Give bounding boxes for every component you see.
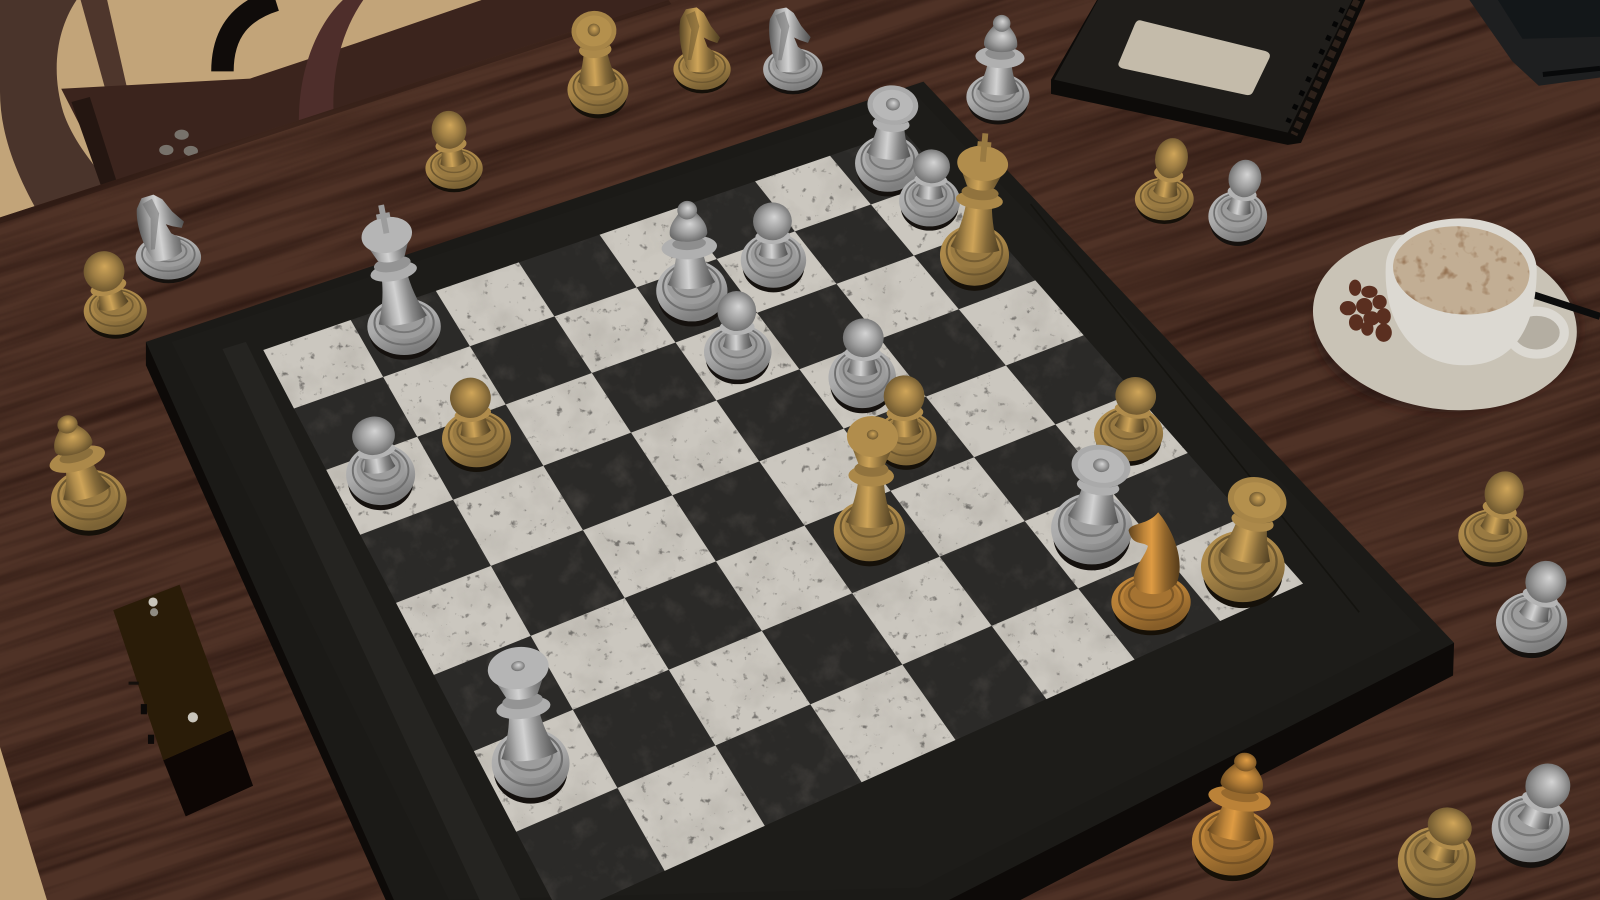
silver pawn, table right xyxy=(1208,157,1267,246)
silver pawn, board centre right xyxy=(828,318,896,413)
chair xyxy=(0,0,127,217)
coffee cup and saucer xyxy=(1312,218,1600,414)
gold pawn, board left xyxy=(442,375,511,472)
gold bishop, table bottom xyxy=(1192,748,1278,881)
gold pawn, behind board xyxy=(425,109,483,192)
device at top right xyxy=(1469,0,1600,86)
silver queen xyxy=(485,643,570,804)
gold pawn, board centre xyxy=(876,374,937,470)
silver bishop, top of table xyxy=(966,14,1030,124)
silver bishop, board xyxy=(656,199,727,327)
cup handle xyxy=(1509,311,1564,354)
leather bag xyxy=(61,0,673,189)
spoon xyxy=(1531,294,1600,316)
chess clock xyxy=(113,585,253,816)
silver knight, top of table xyxy=(763,7,823,94)
saucer xyxy=(1301,216,1588,427)
silver pawn, board left xyxy=(346,413,415,510)
gold knight, board right xyxy=(1111,512,1191,635)
gold queen xyxy=(834,415,905,566)
silver pawn, board centre xyxy=(704,291,772,384)
notebook xyxy=(1051,0,1365,145)
silver pawn, board far corner xyxy=(899,148,960,231)
silver pawn, table right xyxy=(1496,555,1572,658)
gold bishop, left of the table xyxy=(38,408,127,536)
notebook label xyxy=(1118,20,1270,95)
gold pawn, table lower right xyxy=(1398,801,1477,900)
chess board squares xyxy=(263,131,1303,900)
silver knight, table upper left xyxy=(134,191,201,283)
silver king xyxy=(356,200,441,360)
silver rook, board right xyxy=(1051,441,1133,570)
gold king xyxy=(940,131,1011,291)
gold knight, top of table xyxy=(673,7,731,93)
coffee xyxy=(1393,226,1530,314)
gold pawn, table right xyxy=(1135,135,1194,224)
board frame xyxy=(146,82,1454,900)
gold pawn, table upper left xyxy=(79,246,147,339)
gold pawn, table right xyxy=(1458,467,1528,567)
gold rook, board right xyxy=(1201,472,1291,608)
gold rook, top of table xyxy=(567,9,628,118)
cup body xyxy=(1386,218,1537,365)
silver pawn, table lower right xyxy=(1492,757,1577,868)
coffee beans xyxy=(1340,280,1392,342)
silver rook, board far corner xyxy=(855,83,920,196)
silver pawn, board top xyxy=(741,202,806,292)
gold pawn, board right xyxy=(1094,374,1163,466)
